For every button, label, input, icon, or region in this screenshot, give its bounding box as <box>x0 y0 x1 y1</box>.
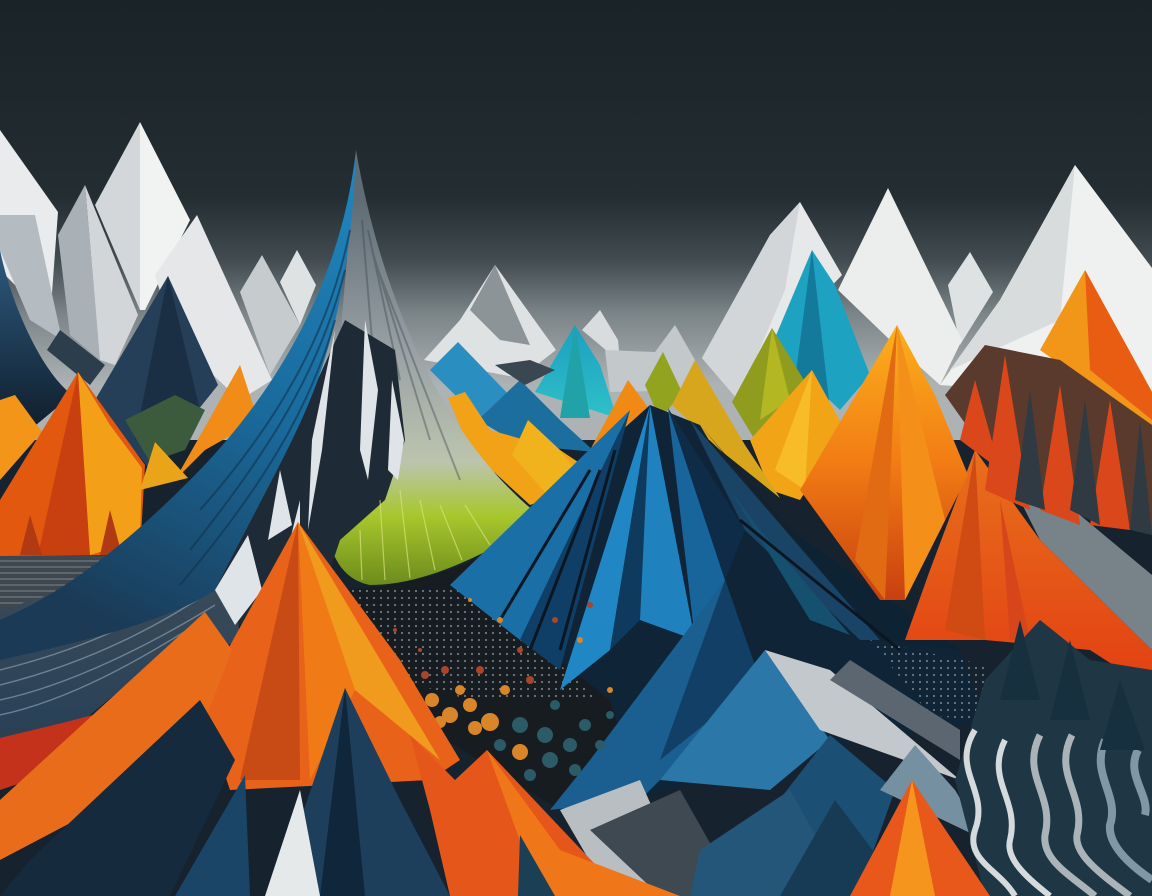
orange fold bottom centre <box>410 735 680 896</box>
blue spire <box>0 150 545 660</box>
navy cones foreground <box>0 688 450 896</box>
spire dark core <box>215 320 405 625</box>
spire right face pleats <box>362 220 460 480</box>
navy cones left <box>0 250 218 470</box>
speckled dots <box>393 598 614 781</box>
white peaks centre <box>424 265 700 392</box>
spire left face <box>0 150 356 660</box>
red right cone and grey flank <box>905 440 1152 690</box>
rippled grey waves bottom right <box>955 620 1152 896</box>
olive and yellow mid cones <box>448 328 845 505</box>
cyan and blue mid cones <box>430 250 870 452</box>
spire blue pleat lines <box>180 230 350 585</box>
grey rippled ground left <box>0 520 240 640</box>
orange right cone <box>800 325 968 600</box>
central blue mountain <box>450 405 985 800</box>
white peaks left <box>0 122 316 400</box>
dark slits on blue mountain <box>500 450 900 650</box>
large orange cone foreground <box>0 522 460 860</box>
spire right face <box>325 150 545 585</box>
spiky red cluster <box>945 270 1152 535</box>
dark ground under the range <box>0 440 1152 896</box>
spire white folds <box>215 320 404 625</box>
orange cone bottom right <box>850 780 990 896</box>
orange cones left <box>0 365 258 556</box>
lower blue folds <box>550 580 985 896</box>
spire yellow green pleats <box>360 490 490 580</box>
dark speckled basin <box>340 500 700 810</box>
dotted patch right of mountain <box>870 640 985 722</box>
rippled waves left <box>0 540 240 790</box>
white peaks right <box>702 165 1152 400</box>
